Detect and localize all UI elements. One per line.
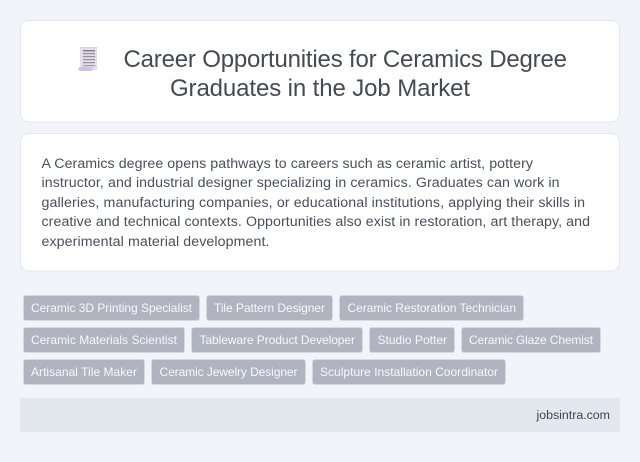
description text: instructor, and industrial designer specializing in ceramics. Graduates can work in: [42, 175, 560, 191]
tag: Ceramic Restoration Technician: Ceramic Restoration Technician: [348, 301, 516, 315]
description text: galleries, manufacturing companies, or educational institutions, applying their skills in: [42, 195, 585, 211]
tag: Ceramic Materials Scientist: Ceramic Materials Scientist: [31, 333, 178, 347]
tag: Ceramic Glaze Chemist: Ceramic Glaze Chemist: [469, 333, 594, 347]
tag: Sculpture Installation Coordinator: Sculpture Installation Coordinator: [320, 365, 498, 379]
tag: Ceramic Materials Scientist: [24, 328, 184, 352]
tag: Tile Pattern Designer: [206, 296, 332, 320]
tag: Artisanal Tile Maker: Artisanal Tile Maker: [31, 365, 137, 379]
tag: Tableware Product Developer: Tableware Product Developer: [200, 333, 355, 347]
description text: creative and technical contexts. Opportunities also exist in restoration, art therapy, and: [42, 214, 590, 230]
tag: Studio Potter: Studio Potter: [378, 333, 447, 347]
tag: Ceramic 3D Printing Specialist: [24, 296, 200, 320]
tag: Tile Pattern Designer: Tile Pattern Designer: [214, 301, 325, 315]
tag: Sculpture Installation Coordinator: [312, 360, 506, 384]
panel: title card: [20, 20, 620, 122]
tag: Ceramic 3D Printing Specialist: Ceramic 3D Printing Specialist: [31, 301, 193, 315]
description text: experimental material development.: [42, 234, 270, 250]
description text: A Ceramics degree opens pathways to careers such as ceramic artist, pottery: [42, 156, 534, 172]
tag: Ceramic Jewelry Designer: Ceramic Jewelry Designer: [160, 365, 298, 379]
tag: Artisanal Tile Maker: [24, 360, 144, 384]
title: Career Opportunities for Ceramics Degree: [124, 46, 567, 73]
footer source text: jobsintra.com: [536, 408, 610, 422]
title: [124, 46, 567, 102]
description text: [42, 156, 590, 250]
job tags: [24, 296, 600, 384]
tag: Ceramic Restoration Technician: [340, 296, 524, 320]
tag: Ceramic Jewelry Designer: [152, 360, 306, 384]
tag: Ceramic Glaze Chemist: [462, 328, 600, 352]
tag: Studio Potter: [370, 328, 454, 352]
footer bar: [20, 398, 620, 432]
title: Graduates in the Job Market: [170, 75, 470, 102]
icon: document scroll: [78, 47, 97, 71]
panel: description card: [20, 134, 620, 271]
tag: Tableware Product Developer: [192, 328, 362, 352]
